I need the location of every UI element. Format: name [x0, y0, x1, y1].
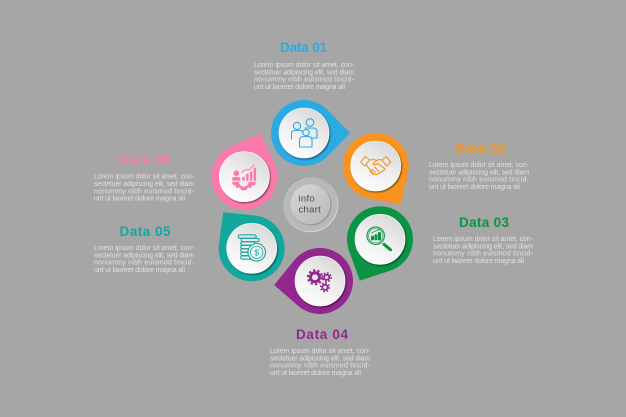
icon: gears — [308, 270, 331, 292]
heading and text: Data 01 — [254, 40, 354, 91]
heading and text: Data 03 — [433, 215, 533, 265]
heading and text: Data 02: unt ut laoreet dolore magna ali — [429, 184, 520, 191]
heading and text: Data 05: Data 05 — [120, 224, 171, 239]
heading and text: Data 04: nonummy nibh euismod tincid- — [270, 363, 370, 370]
heading and text: Data 06: Data 06 — [120, 152, 171, 167]
icon: gear with chart — [232, 165, 256, 190]
heading and text: Data 04: Lorem ipsum dolor sit amet, con- — [270, 348, 370, 355]
heading and text: Data 06: Lorem ipsum dolor sit amet, con- — [94, 174, 194, 181]
heading and text: Data 01: Data 01 — [280, 40, 327, 55]
icon: people — [292, 119, 317, 147]
heading and text: Data 06: unt ut laoreet dolore magna ali — [94, 196, 185, 203]
heading and text: Data 05: unt ut laoreet dolore magna ali — [94, 267, 185, 274]
icon: handshake — [361, 156, 391, 175]
heading and text: Data 05: Lorem ipsum dolor sit amet, con- — [94, 245, 194, 252]
icon: magnifier with bars — [367, 227, 390, 250]
heading and text: Data 05: nonummy nibh euismod tincid- — [94, 260, 194, 267]
heading and text: Data 02 — [429, 141, 529, 191]
heading and text: Data 03: unt ut laoreet dolore magna ali — [433, 258, 524, 265]
pin: teal coins: $ — [254, 247, 259, 257]
heading and text: Data 01: unt ut laoreet dolore magna ali — [254, 84, 345, 91]
heading and text: Data 01: nonummy nibh euismod tincid- — [254, 77, 354, 84]
heading and text: Data 01: sectetuer adipiscing elit, sed diam — [254, 69, 354, 76]
heading and text: Data 05 — [94, 224, 194, 274]
centre badge: info chart — [282, 176, 338, 232]
heading and text: Data 03: Lorem ipsum dolor sit amet, con- — [433, 236, 533, 243]
centre badge: info chart: chart — [298, 204, 321, 216]
heading and text: Data 03: Data 03 — [459, 215, 509, 230]
heading and text: Data 04: sectetuer adipiscing elit, sed diam — [270, 355, 370, 362]
heading and text: Data 02: Data 02 — [456, 141, 506, 156]
heading and text: Data 04: Data 04 — [296, 327, 348, 342]
pin: orange handshake — [330, 120, 428, 223]
pin: teal coins — [197, 192, 298, 295]
heading and text: Data 04 — [270, 327, 370, 377]
pin: green magnifier chart — [330, 195, 424, 295]
heading and text: Data 03: sectetuer adipiscing elit, sed diam — [433, 243, 533, 250]
heading and text: Data 06: sectetuer adipiscing elit, sed diam — [94, 181, 194, 188]
heading and text: Data 06: nonummy nibh euismod tincid- — [94, 188, 194, 195]
heading and text: Data 06 — [94, 152, 194, 203]
heading and text: Data 03: nonummy nibh euismod tincid- — [433, 251, 533, 258]
heading and text: Data 02: nonummy nibh euismod tincid- — [429, 177, 529, 184]
heading and text: Data 05: sectetuer adipiscing elit, sed diam — [94, 252, 194, 259]
centre badge: info chart: info — [298, 194, 315, 204]
pin: purple gears — [271, 245, 356, 318]
icon: coins — [238, 235, 266, 261]
heading and text: Data 02: Lorem ipsum dolor sit amet, con- — [429, 162, 529, 169]
pin: pink gear with chart — [202, 122, 291, 219]
heading and text: Data 02: sectetuer adipiscing elit, sed diam — [429, 169, 529, 176]
heading and text: Data 04: unt ut laoreet dolore magna ali — [270, 370, 361, 377]
heading and text: Data 01: Lorem ipsum dolor sit amet, con- — [254, 62, 354, 69]
pin: blue people — [271, 100, 350, 166]
